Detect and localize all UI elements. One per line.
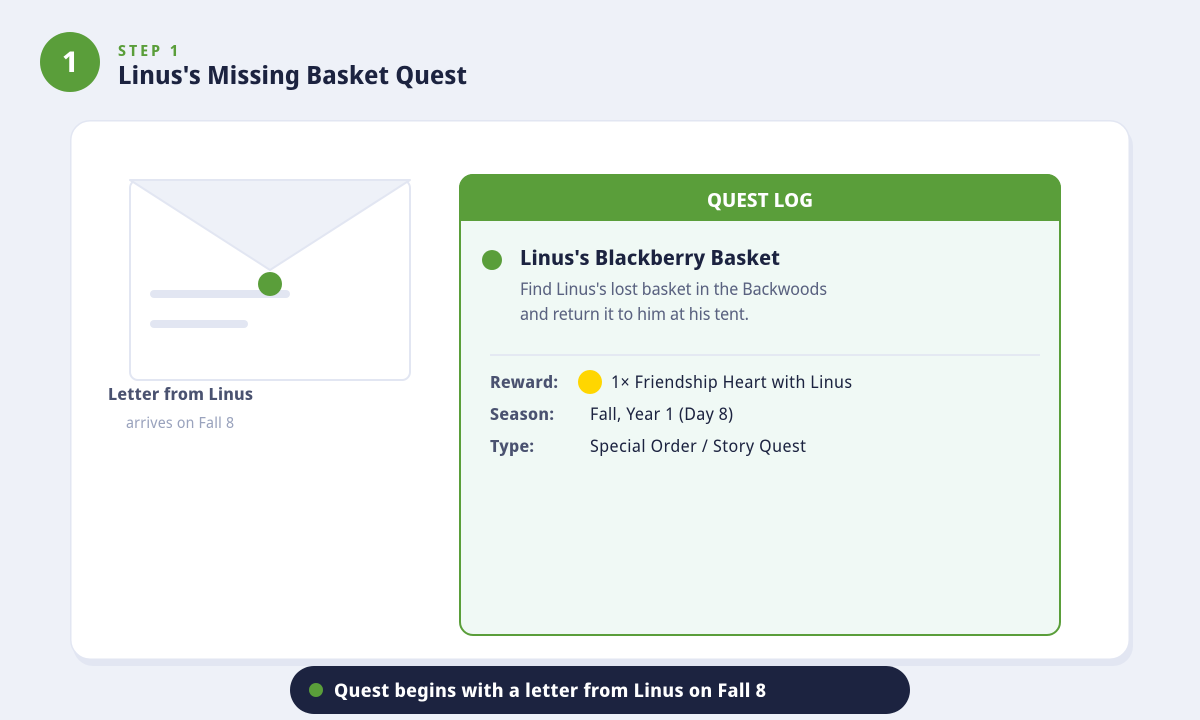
step header — [40, 32, 467, 92]
quest description: and return it to him at his tent. — [520, 302, 749, 325]
type row: Special Order / Story Quest — [590, 434, 806, 457]
season row: Season: — [490, 402, 554, 425]
callout pill — [290, 666, 910, 714]
step number badge: 1 — [62, 42, 78, 81]
icon: envelope letter — [130, 180, 410, 380]
title: Linus's Missing Basket Quest — [118, 58, 467, 92]
quest description: Find Linus's lost basket in the Backwoods — [520, 277, 827, 300]
step label: STEP 1 — [118, 41, 178, 61]
season row: Fall, Year 1 (Day 8) — [590, 402, 733, 425]
season row — [490, 402, 733, 425]
quest log header — [459, 174, 1061, 221]
step number badge — [40, 32, 100, 92]
letter caption: Letter from Linus — [108, 382, 253, 405]
reward row: Reward: — [490, 370, 558, 393]
quest bullet — [482, 250, 502, 270]
reward row: 1× Friendship Heart with Linus — [611, 370, 852, 393]
type row: Type: — [490, 434, 534, 457]
quest name: Linus's Blackberry Basket — [520, 244, 780, 272]
type row — [490, 434, 806, 457]
reward row — [490, 370, 852, 394]
panel: quest log — [459, 174, 1061, 635]
quest log header: QUEST LOG — [707, 186, 813, 213]
letter sub-caption: arrives on Fall 8 — [126, 413, 234, 433]
callout pill: Quest begins with a letter from Linus on Fall 8 — [334, 677, 766, 703]
panel: main card — [71, 121, 1133, 666]
quest description — [520, 277, 827, 325]
